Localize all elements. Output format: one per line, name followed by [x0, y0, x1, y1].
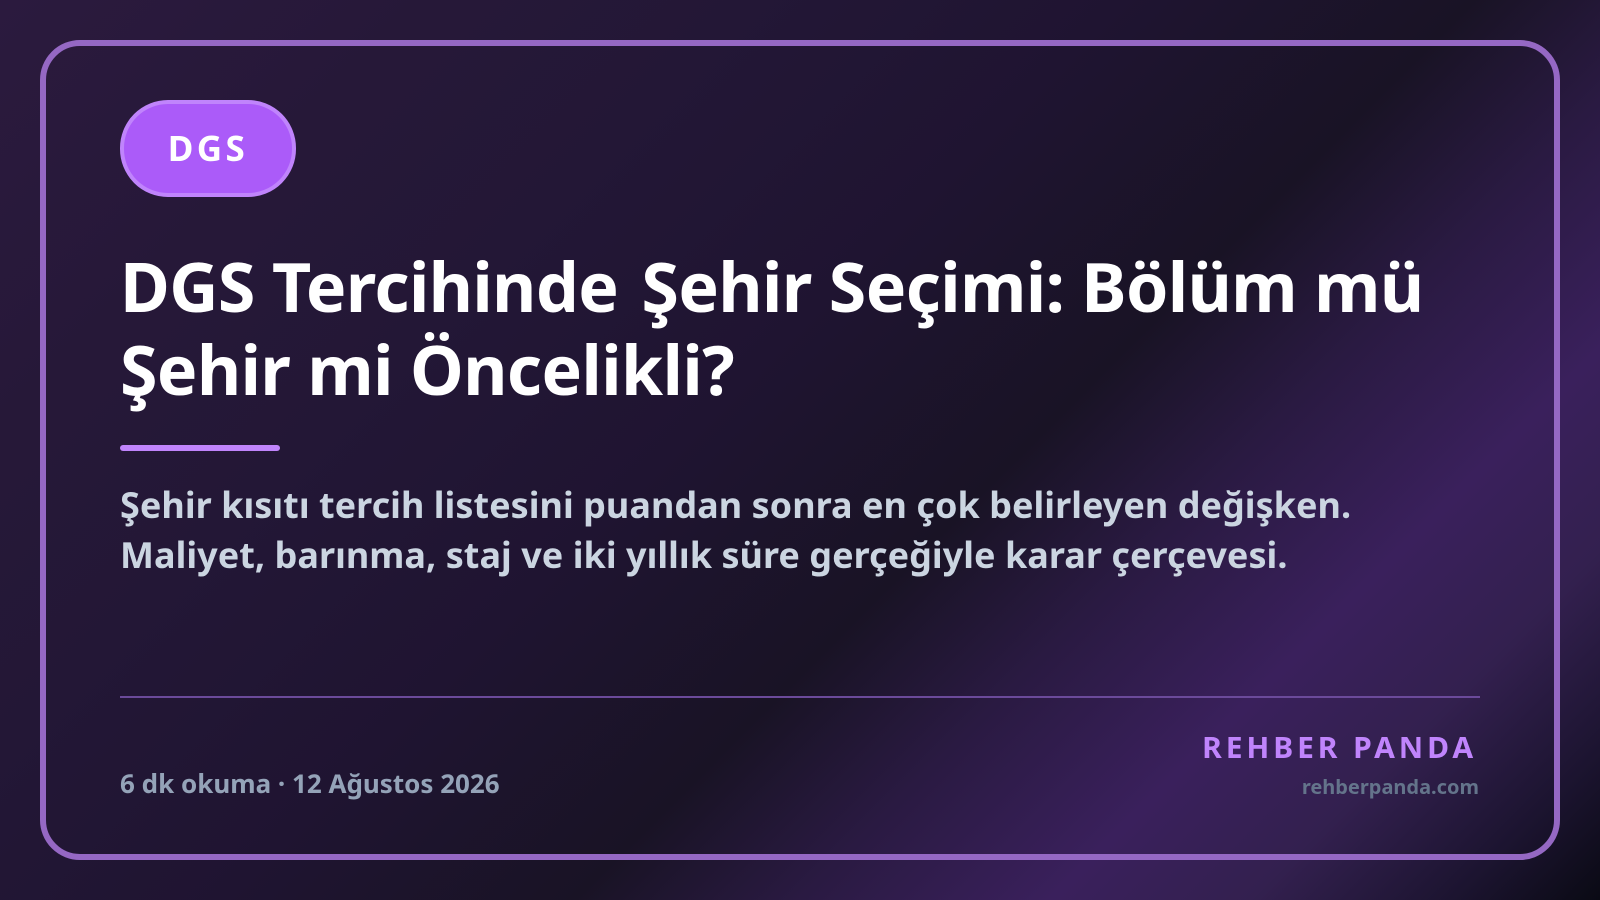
brand name: REHBER PANDA — [1202, 726, 1477, 767]
subtitle text: Şehir kısıtı tercih listesini puandan sonra en çok belirleyen değişken. — [120, 480, 1351, 529]
category badge: DGS — [120, 100, 296, 197]
brand url: rehberpanda.com — [1302, 773, 1479, 800]
reading time and date: 6 dk okuma · 12 Ağustos 2026 — [120, 765, 500, 801]
accent rule — [120, 445, 280, 451]
title: DGS Tercihinde Şehir Seçimi: Bölüm mü Şehir mi Öncelikli? — [120, 239, 1424, 415]
category badge: DGS: DGS — [168, 125, 248, 172]
subtitle text — [120, 480, 1351, 579]
footer divider — [120, 696, 1480, 698]
subtitle text: Maliyet, barınma, staj ve iki yıllık süre gerçeğiyle karar çerçevesi. — [120, 530, 1288, 579]
